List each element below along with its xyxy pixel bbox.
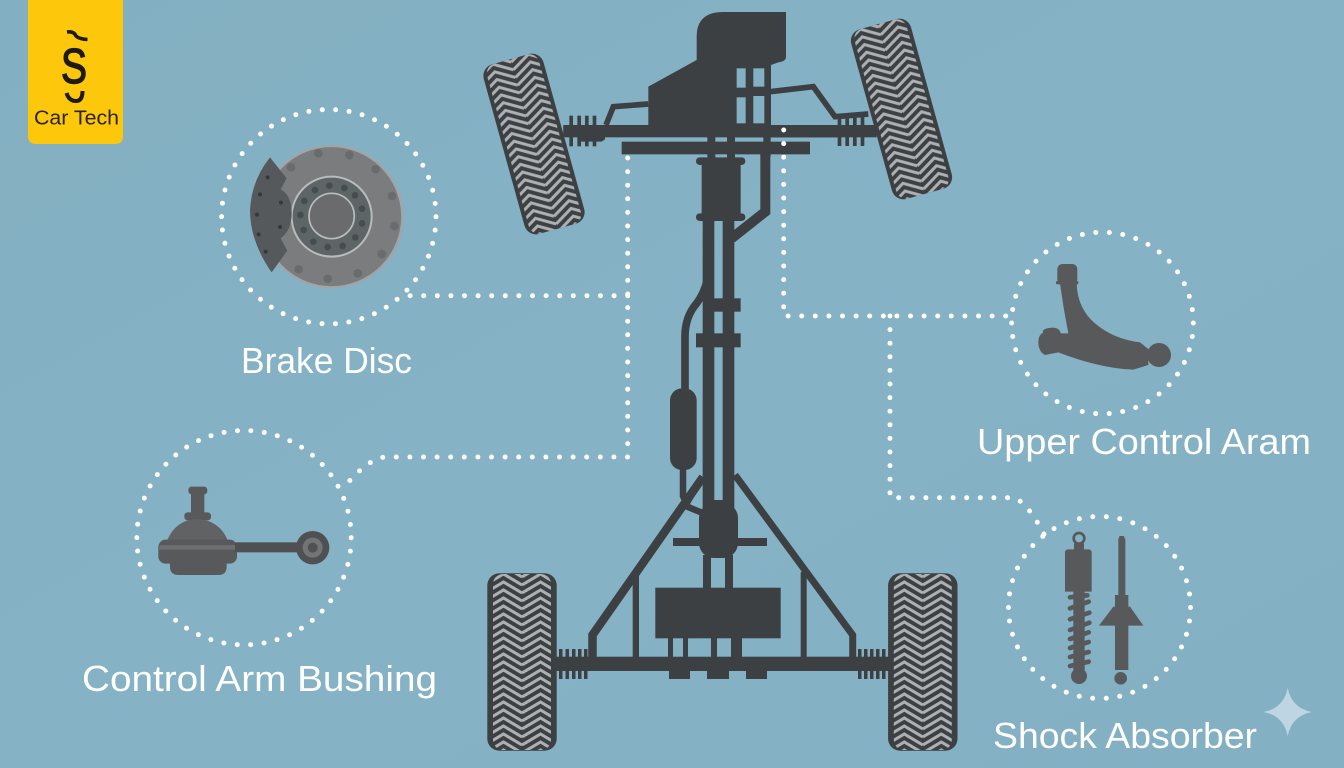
rear tire left [487, 573, 557, 751]
icon: sparkle [1264, 688, 1312, 736]
label: Shock Absorber: Shock Absorber [993, 715, 1257, 756]
chassis diagram [481, 12, 958, 751]
dotted ring [222, 110, 436, 324]
dotted connector: upper control arm and shock absorber [784, 130, 1046, 538]
central spine: rods, brackets and canister [670, 260, 741, 517]
dotted ring [1008, 516, 1190, 698]
callout: shock absorber [1008, 516, 1190, 698]
icon: shock absorber [1065, 533, 1143, 685]
dotted ring [137, 430, 351, 645]
callout: control arm bushing [137, 430, 351, 645]
label: Upper Control Aram: Upper Control Aram [977, 421, 1311, 462]
upper chassis: engine block and front axle [563, 12, 877, 260]
label: Brake Disc: Brake Disc [241, 340, 412, 381]
icon: brake disc [250, 146, 402, 287]
logo: Car Tech: Car Tech [34, 108, 119, 130]
front tire right [848, 16, 955, 202]
icon: upper control arm [1038, 264, 1171, 370]
logo: Car Tech: S [61, 40, 87, 94]
callout: brake disc [222, 110, 436, 324]
rear tire right [888, 573, 958, 751]
logo: Car Tech [28, 0, 123, 144]
callout: upper control arm [1012, 232, 1193, 414]
label: Control Arm Bushing: Control Arm Bushing [82, 658, 437, 699]
icon: control arm bushing [158, 487, 329, 575]
dotted ring [1012, 232, 1193, 414]
lower chassis: triangle frame, ball joint and rear axle [553, 468, 890, 679]
dotted connector: brake disc and control arm bushing [345, 158, 628, 486]
front tire left [481, 51, 587, 237]
